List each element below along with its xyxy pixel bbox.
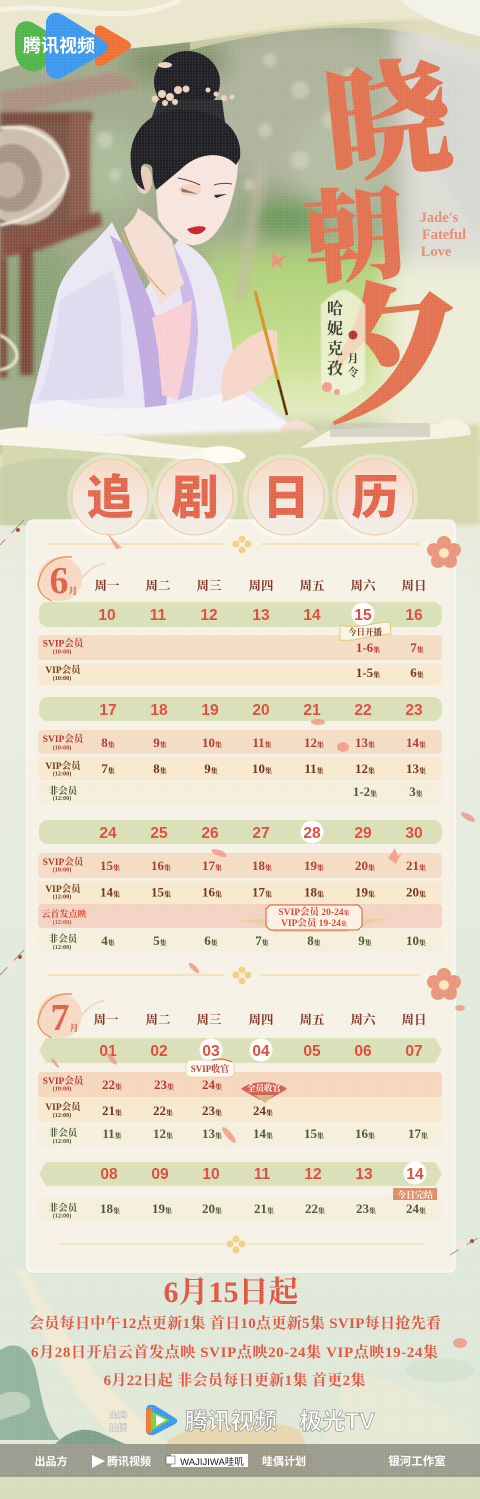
divider June — [48, 536, 420, 554]
non-member row: 12集 — [153, 1126, 173, 1141]
heading circle 1: 追 — [86, 459, 134, 528]
June month badge: 6 — [50, 560, 68, 602]
cloud premiere row — [38, 904, 442, 928]
photo: blurred garden background — [0, 0, 480, 470]
dates: 04 — [252, 1043, 270, 1060]
title: character xi: 夕 — [309, 229, 477, 453]
non-member row: (12:00) — [53, 944, 71, 951]
non-member row: 10集 — [406, 933, 426, 948]
SVIP row: SVIP会员 — [43, 856, 85, 868]
producer WAJIJIWA — [166, 1454, 248, 1468]
release info lines — [29, 1314, 441, 1389]
photo: face — [156, 155, 238, 245]
cast names: 克 — [327, 339, 343, 358]
cloud premiere callout: VIP会员 19-24集 — [281, 917, 347, 929]
SVIP row: 19集 — [304, 858, 324, 873]
non-member row: 22集 — [305, 1201, 325, 1216]
divider July — [48, 966, 420, 984]
dates — [98, 607, 423, 624]
June month badge — [38, 557, 105, 602]
dates: 13 — [252, 607, 270, 624]
VIP row: (12:00) — [53, 1112, 71, 1119]
dates: 08 — [100, 1166, 118, 1183]
SVIP row — [38, 1072, 442, 1097]
flower June — [427, 536, 461, 568]
dates: 05 — [303, 1043, 321, 1060]
heading circle 2: 剧 — [172, 459, 218, 528]
all-members finale fan: 全员收官 — [247, 1083, 281, 1093]
VIP row: 10集 — [252, 761, 272, 776]
non-member row: 23集 — [356, 1201, 376, 1216]
VIP row: 13集 — [406, 761, 426, 776]
dates: 07 — [405, 1043, 423, 1060]
June week 2 — [38, 697, 442, 805]
VIP row: 19集 — [355, 884, 375, 900]
premiere tag — [340, 622, 391, 640]
date bar — [39, 602, 442, 627]
dates: 21 — [303, 702, 321, 719]
SVIP row: SVIP会员 — [43, 733, 85, 745]
non-member row: (12:00) — [53, 1138, 71, 1145]
June weekday headers: 周三 — [196, 579, 222, 593]
June weekday headers: 周二 — [145, 579, 171, 593]
non-member row: 8集 — [307, 933, 321, 948]
SVIP row: (10:00) — [53, 648, 71, 656]
dates: 26 — [201, 825, 219, 842]
dates: 06 — [354, 1043, 372, 1060]
non-member row: 7集 — [255, 933, 269, 948]
dates: 09 — [151, 1166, 169, 1183]
producer studio: 银河工作室 — [388, 1454, 446, 1468]
June weekday headers: 周六 — [350, 579, 377, 593]
exclusive label — [109, 1408, 127, 1434]
July weekday headers: 周四 — [248, 1013, 274, 1027]
line 2: 6月28日开启云首发点映 SVIP点映20-24集 VIP点映19-24集 — [31, 1343, 438, 1361]
non-member row: 非会员 — [49, 785, 79, 797]
lower swirl border of hero — [0, 420, 480, 525]
July weekday headers: 周六 — [350, 1013, 377, 1027]
June week 1 — [38, 602, 442, 685]
non-member row: 非会员 — [49, 1127, 79, 1139]
photo: woman dress — [28, 222, 288, 438]
finale tag: 今日完结 — [397, 1189, 433, 1200]
July week 1 — [38, 1038, 442, 1146]
non-member row — [38, 1123, 442, 1146]
non-member row: 4集 — [101, 933, 115, 948]
cast names — [327, 299, 343, 378]
dates: 11 — [150, 607, 167, 624]
non-member row: 3集 — [409, 784, 423, 799]
dates: 17 — [99, 702, 117, 719]
dates: 22 — [354, 702, 372, 719]
VIP row: VIP会员 — [45, 1101, 82, 1113]
non-member row — [38, 782, 442, 805]
VIP row: 7集 — [101, 761, 115, 776]
premiere date marker — [352, 602, 374, 626]
logo: wordmark: 腾讯视频 — [23, 36, 95, 56]
non-member row: 13集 — [202, 1126, 222, 1141]
VIP row — [38, 881, 442, 904]
SVIP row: SVIP会员 — [43, 1075, 85, 1087]
VIP row: 6集 — [410, 665, 424, 680]
dates: 27 — [252, 825, 270, 842]
english title line 3: Love — [421, 244, 452, 260]
SVIP row: 23集 — [154, 1077, 174, 1092]
cast name two: 月 — [348, 352, 358, 365]
release info heading: 6月15日起 — [164, 1276, 298, 1309]
VIP row: (12:00) — [53, 894, 71, 900]
photo: facial features — [178, 178, 232, 234]
english title line 2: Fateful — [422, 227, 466, 243]
title: calligraphy drama name — [299, 16, 477, 453]
dates: 14 — [406, 1166, 424, 1183]
dates: 30 — [405, 825, 423, 842]
dates: 11 — [254, 1166, 271, 1183]
blossom branches — [0, 520, 478, 1255]
SVIP row: (10:00) — [53, 866, 71, 874]
heading circle 3: 日 — [262, 459, 310, 528]
SVIP row: 11集 — [252, 735, 272, 750]
platform logos — [109, 1405, 375, 1435]
June weekday headers — [94, 579, 427, 593]
premiere tag: 今日开播 — [348, 627, 382, 637]
smoke wash at top right — [395, 30, 480, 240]
SVIP row: 12集 — [304, 735, 324, 750]
photo: necklace — [122, 232, 165, 295]
July weekday headers: 周五 — [299, 1013, 325, 1027]
dates: 19 — [201, 702, 219, 719]
cloud premiere date marker — [300, 820, 324, 844]
SVIP finale tag — [186, 1059, 234, 1077]
SVIP row: 1-6集 — [356, 640, 380, 655]
SVIP row: 15集 — [100, 858, 120, 873]
non-member row: 21集 — [254, 1201, 274, 1216]
VIP row — [38, 663, 442, 685]
July month badge — [38, 994, 105, 1039]
branch left June — [0, 520, 24, 545]
July weekday headers: 周三 — [196, 1013, 222, 1027]
SVIP finale tag: SVIP收官 — [191, 1063, 229, 1074]
producer Tencent icon — [92, 1455, 105, 1468]
logo: blue lobe — [46, 13, 108, 79]
seal — [348, 330, 358, 340]
plaque flowers — [322, 382, 340, 395]
non-member row: (12:00) — [53, 1212, 71, 1220]
June weekday headers: 周一 — [94, 579, 120, 593]
non-member row: 非会员 — [49, 1202, 79, 1214]
VIP row: (10:00) — [53, 675, 71, 682]
VIP row: 16集 — [202, 884, 222, 900]
dates: 23 — [405, 702, 423, 719]
VIP row: 8集 — [153, 761, 167, 776]
producer label: 出品方 — [34, 1454, 68, 1468]
SVIP row: 8集 — [101, 735, 115, 750]
dates: 18 — [150, 702, 168, 719]
non-member row: 11集 — [102, 1126, 122, 1141]
dates: 12 — [304, 1166, 322, 1183]
July weekday headers: 周二 — [145, 1013, 171, 1027]
July weekday headers: 周日 — [401, 1013, 427, 1027]
SVIP row: SVIP会员 — [43, 638, 85, 650]
July weekday headers: 周一 — [93, 1013, 119, 1027]
bottom landscape decoration — [0, 1270, 480, 1477]
top veil band — [0, 0, 480, 72]
July month badge: 月 — [69, 1023, 79, 1033]
June weekday headers: 周四 — [248, 579, 274, 593]
SVIP row: (10:00) — [53, 1086, 71, 1092]
date bar — [39, 820, 442, 844]
June month badge: 月 — [68, 586, 78, 596]
photo: tree trunk — [240, 165, 262, 300]
photo: hair — [131, 51, 240, 190]
cast names: 孜 — [327, 360, 343, 378]
non-member row: 24集 — [406, 1201, 426, 1216]
cast names: 妮 — [327, 320, 343, 338]
non-member row: 20集 — [202, 1201, 222, 1216]
June week 3 — [38, 820, 442, 952]
line 1: 会员每日中午12点更新1集 首日10点更新5集 SVIP每日抢先看 — [29, 1314, 441, 1332]
dates: 12 — [200, 607, 218, 624]
cloud premiere row: 云首发点映 — [41, 908, 87, 919]
dates: 20 — [252, 702, 270, 719]
producer WAJIJIWA: WAJIJIWA哇叽 — [180, 1456, 244, 1468]
cloud premiere callout — [240, 905, 389, 932]
date bar — [39, 1038, 442, 1063]
heading circle 4: 历 — [352, 459, 398, 528]
VIP row: (12:00) — [53, 770, 71, 778]
dates: 02 — [150, 1043, 168, 1060]
dates — [100, 1166, 424, 1183]
right mist — [405, 1358, 475, 1382]
non-member row: 14集 — [253, 1126, 273, 1141]
non-member row: 18集 — [100, 1201, 120, 1216]
VIP row: 11集 — [304, 761, 324, 776]
VIP row: 9集 — [204, 761, 218, 776]
VIP row: 20集 — [406, 884, 426, 900]
non-member row: 15集 — [304, 1126, 324, 1141]
non-member row: 6集 — [204, 933, 218, 948]
non-member row: (12:00) — [53, 795, 71, 802]
Tencent Video icon — [146, 1405, 177, 1435]
cloud premiere callout: SVIP会员 20-24集 — [278, 906, 350, 918]
dates: 16 — [405, 607, 423, 624]
non-member row: 19集 — [152, 1201, 172, 1216]
VIP row: 1-5集 — [356, 665, 380, 680]
photo: hand and brush — [222, 290, 318, 432]
dates: 01 — [99, 1043, 117, 1060]
dates: 14 — [303, 607, 321, 624]
branch right July — [450, 1238, 478, 1255]
July week 2 — [38, 1162, 442, 1221]
dates — [99, 1043, 423, 1060]
dates: 25 — [150, 825, 168, 842]
cast names: 哈 — [327, 299, 343, 318]
heading circle 3 — [243, 454, 329, 540]
Aurora TV wordmark: 极光TV — [299, 1408, 375, 1434]
photo: ear — [136, 166, 152, 194]
bottom divider — [60, 1236, 425, 1254]
english title — [420, 210, 466, 260]
VIP row: 12集 — [355, 761, 375, 776]
logo: green lobe — [15, 21, 70, 71]
dates: 10 — [202, 1166, 220, 1183]
calendar paper panel — [27, 520, 455, 1272]
chase calendar heading circles — [67, 454, 418, 540]
VIP row: VIP会员 — [45, 664, 82, 676]
non-member row: 9集 — [358, 933, 372, 948]
falling petals — [50, 533, 476, 1348]
photo: hair ornaments — [152, 62, 234, 106]
VIP row: 21集 — [102, 1103, 122, 1118]
teal mountain — [0, 1345, 60, 1440]
flower July — [427, 968, 461, 1000]
bottom strip — [0, 1477, 480, 1499]
dates — [99, 702, 423, 719]
logo: Tencent Video top left — [15, 13, 131, 79]
band background — [0, 1444, 480, 1477]
June weekday headers: 周日 — [401, 579, 427, 593]
VIP row: 15集 — [151, 884, 171, 900]
exclusive label: 独播 — [109, 1421, 127, 1434]
SVIP row: 14集 — [406, 735, 426, 750]
SVIP row: 7集 — [410, 640, 424, 655]
VIP row: 18集 — [304, 884, 324, 900]
non-member row — [38, 929, 442, 952]
cast name two — [348, 352, 358, 379]
dates: 28 — [303, 825, 321, 842]
SVIP row: 13集 — [355, 735, 375, 750]
dates: 15 — [354, 607, 372, 624]
photo: smoke swirl left — [0, 125, 68, 370]
July month badge: 7 — [50, 997, 70, 1039]
producer plan: 哇偶计划 — [262, 1454, 306, 1468]
photo: skin neck and chest — [124, 208, 184, 305]
heading circle 1 — [67, 454, 153, 540]
VIP row: VIP会员 — [45, 883, 82, 895]
non-member row: 非会员 — [49, 933, 79, 945]
cloud premiere row: (12:00) — [53, 919, 71, 926]
logo: orange lobe — [95, 26, 131, 66]
title: character zhao: 朝 — [299, 154, 409, 304]
exclusive label: 全网 — [109, 1408, 127, 1421]
non-member row: 1-2集 — [353, 784, 377, 799]
teal hill — [55, 1430, 125, 1444]
June weekday headers: 周五 — [299, 579, 325, 593]
date bar — [39, 697, 442, 721]
branch left June lower — [0, 950, 24, 975]
SVIP row — [38, 853, 442, 878]
SVIP row: 16集 — [151, 858, 171, 873]
non-member row: 16集 — [355, 1126, 375, 1141]
line 3: 6月22日起 非会员每日更新1集 首更2集 — [104, 1371, 366, 1389]
dates: 03 — [202, 1043, 220, 1060]
VIP row — [38, 1097, 442, 1122]
peach hill — [165, 1422, 318, 1477]
SVIP row: (10:00) — [53, 744, 71, 752]
photo: foliage highlights — [97, 53, 357, 191]
dates: 13 — [355, 1166, 373, 1183]
dates: 10 — [98, 607, 116, 624]
non-member row: 5集 — [153, 933, 167, 948]
VIP row: 23集 — [202, 1103, 222, 1118]
SVIP row: 20集 — [355, 858, 375, 873]
VIP row: 14集 — [100, 884, 120, 900]
July weekday headers — [93, 1013, 427, 1027]
plaque shape — [321, 290, 365, 395]
photo: wooden pavilion — [0, 72, 142, 378]
SVIP row: 10集 — [202, 735, 222, 750]
VIP row: 22集 — [153, 1103, 173, 1118]
VIP row — [38, 757, 442, 780]
finale tag — [393, 1188, 437, 1200]
non-member row — [38, 1197, 442, 1221]
non-member row: 17集 — [408, 1126, 428, 1141]
producers band — [0, 1444, 480, 1477]
VIP row: 24集 — [253, 1103, 273, 1118]
dates: 24 — [99, 825, 117, 842]
cream swooshes — [15, 1270, 170, 1444]
english title line 1: Jade's — [420, 210, 459, 226]
Tencent Video wordmark: 腾讯视频 — [185, 1408, 277, 1434]
cast name two: 令 — [348, 365, 358, 379]
date bar — [39, 1162, 442, 1186]
finale date marker — [404, 1162, 426, 1184]
SVIP row: 22集 — [102, 1077, 122, 1092]
SVIP row: 21集 — [406, 858, 426, 873]
butterfly petal — [272, 250, 287, 268]
SVIP row — [38, 730, 442, 754]
SVIP row: 17集 — [202, 858, 222, 873]
hero photo: actress at writing desk in a garden — [0, 0, 480, 470]
dates — [99, 825, 423, 842]
cast plaque — [321, 290, 365, 395]
producer Tencent: 腾讯视频 — [107, 1454, 151, 1468]
heading circle 4 — [332, 454, 418, 540]
all-members finale fan — [241, 1082, 287, 1103]
SVIP row: 9集 — [153, 735, 167, 750]
dates: 29 — [354, 825, 372, 842]
VIP row: 17集 — [252, 884, 272, 900]
heading circle 2 — [152, 454, 238, 540]
SVIP row — [38, 635, 442, 660]
SVIP row: 18集 — [252, 858, 272, 873]
date markers — [200, 1038, 272, 1062]
VIP row: VIP会员 — [45, 760, 82, 772]
title: character xiao: 晓 — [316, 16, 459, 208]
SVIP row: 24集 — [202, 1077, 222, 1092]
